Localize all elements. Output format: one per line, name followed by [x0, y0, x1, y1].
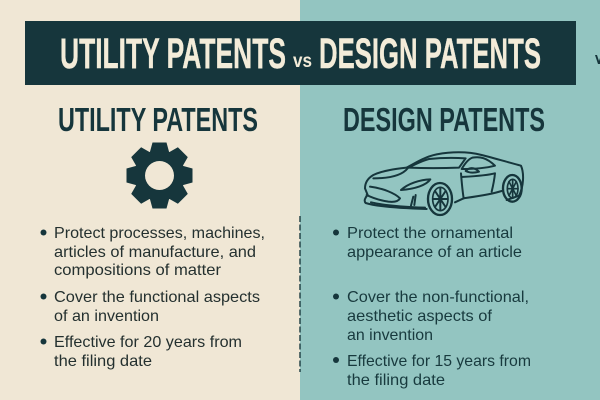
bullet 1: compositions of matter	[54, 262, 222, 279]
stray edge glyph	[595, 55, 600, 64]
bullet 2: of an invention	[54, 308, 159, 325]
bullet 2: Cover the non-functional,	[347, 289, 529, 306]
bullet 3: Effective for 15 years from	[347, 353, 531, 370]
icon: car	[365, 152, 523, 215]
heading: utility patents: UTILITY PATENTS	[58, 102, 258, 139]
bullet 2: an invention	[347, 327, 433, 344]
bullet 3	[40, 334, 242, 370]
bullets: design	[333, 225, 531, 389]
bullet 2	[40, 289, 260, 325]
bullet 3	[333, 353, 531, 389]
bullet 1: Protect the ornamental	[347, 225, 513, 242]
bullet 1	[40, 225, 265, 279]
panel: utility background	[0, 0, 300, 400]
bullet 1	[333, 225, 522, 261]
bullet 1: Protect processes, machines,	[54, 225, 265, 242]
bullet 1: appearance of an article	[347, 244, 522, 261]
bullet 3: the filing date	[54, 353, 152, 370]
title banner	[25, 21, 576, 85]
bullet 1: articles of manufacture, and	[54, 244, 256, 261]
bullet 3: the filing date	[347, 372, 445, 389]
center divider	[299, 216, 301, 372]
panel: design background	[300, 0, 600, 400]
title banner: UTILITY PATENTS	[60, 30, 286, 78]
bullet 2: aesthetic aspects of	[347, 308, 493, 325]
bullet 2: Cover the functional aspects	[54, 289, 260, 306]
icon: gear	[126, 142, 192, 208]
title banner: vs	[293, 51, 312, 72]
bullet 2	[333, 289, 529, 344]
bullets: utility	[40, 225, 265, 370]
bullet 3: Effective for 20 years from	[54, 334, 242, 351]
